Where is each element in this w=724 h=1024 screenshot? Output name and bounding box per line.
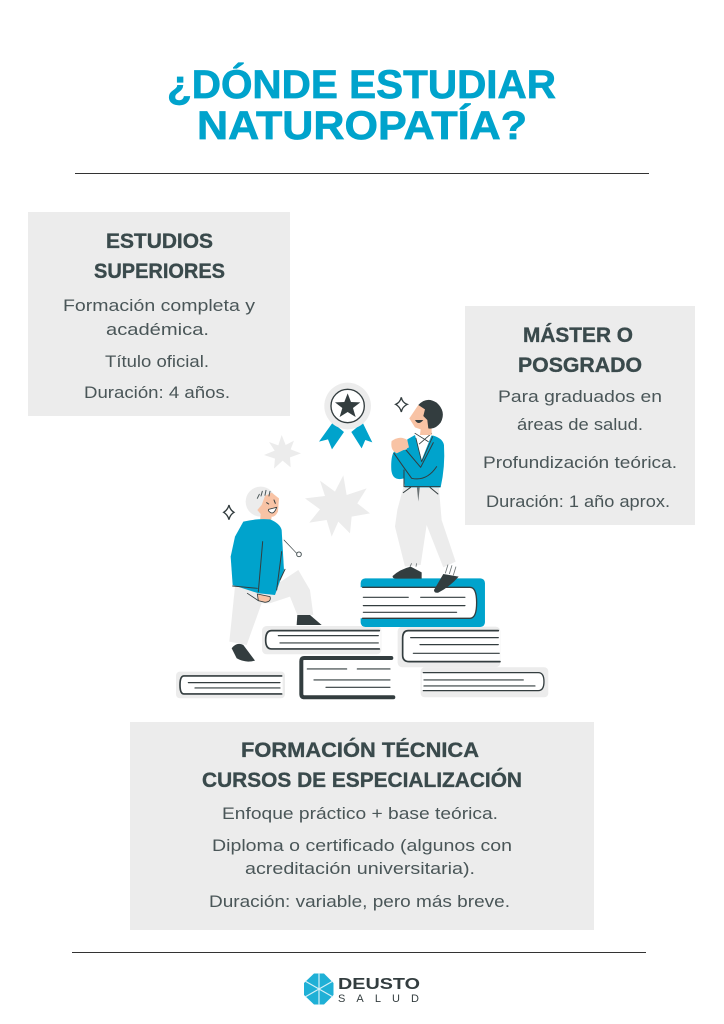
text block: formación técnica: acreditación universitaria). (245, 859, 475, 878)
decorative star small (264, 435, 301, 469)
book: middle left (262, 626, 381, 654)
text block: máster o posgrado: Duración: 1 año aprox. (486, 492, 670, 511)
title (167, 61, 556, 148)
text block: máster o posgrado: Profundización teórica. (483, 453, 677, 472)
text block: estudios superiores: académica. (106, 320, 209, 339)
heading: máster o posgrado (518, 324, 642, 377)
title: NATUROPATÍA? (197, 103, 527, 148)
logo: deusto salud: DEUSTO (338, 976, 420, 993)
heading: formación técnica (202, 738, 522, 792)
icon: sparkle left (224, 505, 234, 520)
panel: estudios superiores (28, 212, 290, 416)
icon: medal (319, 383, 372, 449)
text block: estudios superiores (63, 296, 256, 402)
text block: máster o posgrado (483, 387, 677, 511)
text block: formación técnica: Duración: variable, pero más breve. (209, 892, 510, 911)
icon: sparkle right (396, 397, 407, 412)
book: middle right (398, 627, 500, 667)
decorative star large (305, 475, 370, 537)
figure: student on the left (229, 487, 322, 662)
panel: máster o posgrado (465, 306, 695, 525)
panel: formación técnica (130, 722, 594, 930)
figure: student on the right (391, 400, 459, 593)
book: bottom left (176, 672, 285, 698)
logo: deusto salud: SALUD (338, 993, 419, 1005)
text block: formación técnica: Enfoque práctico + base teórica. (222, 804, 498, 823)
heading: estudios superiores (94, 230, 225, 283)
heading: máster o posgrado: POSGRADO (518, 354, 642, 377)
text block: máster o posgrado: áreas de salud. (517, 415, 643, 434)
heading: formación técnica: CURSOS DE ESPECIALIZACIÓN (202, 768, 522, 792)
book: dark centre (301, 658, 393, 697)
title: ¿DÓNDE ESTUDIAR (167, 61, 556, 107)
text block: formación técnica (209, 804, 512, 911)
text block: estudios superiores: Duración: 4 años. (84, 383, 230, 402)
heading: estudios superiores: ESTUDIOS (106, 230, 213, 253)
book: bottom right (421, 667, 548, 697)
heading: formación técnica: FORMACIÓN TÉCNICA (241, 738, 479, 762)
book: top blue (357, 578, 485, 627)
text block: formación técnica: Diploma o certificado (algunos con (212, 836, 512, 855)
heading: máster o posgrado: MÁSTER O (523, 324, 633, 347)
logo: deusto salud (304, 973, 420, 1005)
heading: estudios superiores: SUPERIORES (94, 260, 225, 283)
text block: estudios superiores: Título oficial. (105, 352, 209, 371)
text block: estudios superiores: Formación completa y (63, 296, 256, 315)
text block: máster o posgrado: Para graduados en (498, 387, 662, 406)
illustration: people climbing books (176, 383, 548, 698)
icon: logo mark (304, 973, 334, 1005)
